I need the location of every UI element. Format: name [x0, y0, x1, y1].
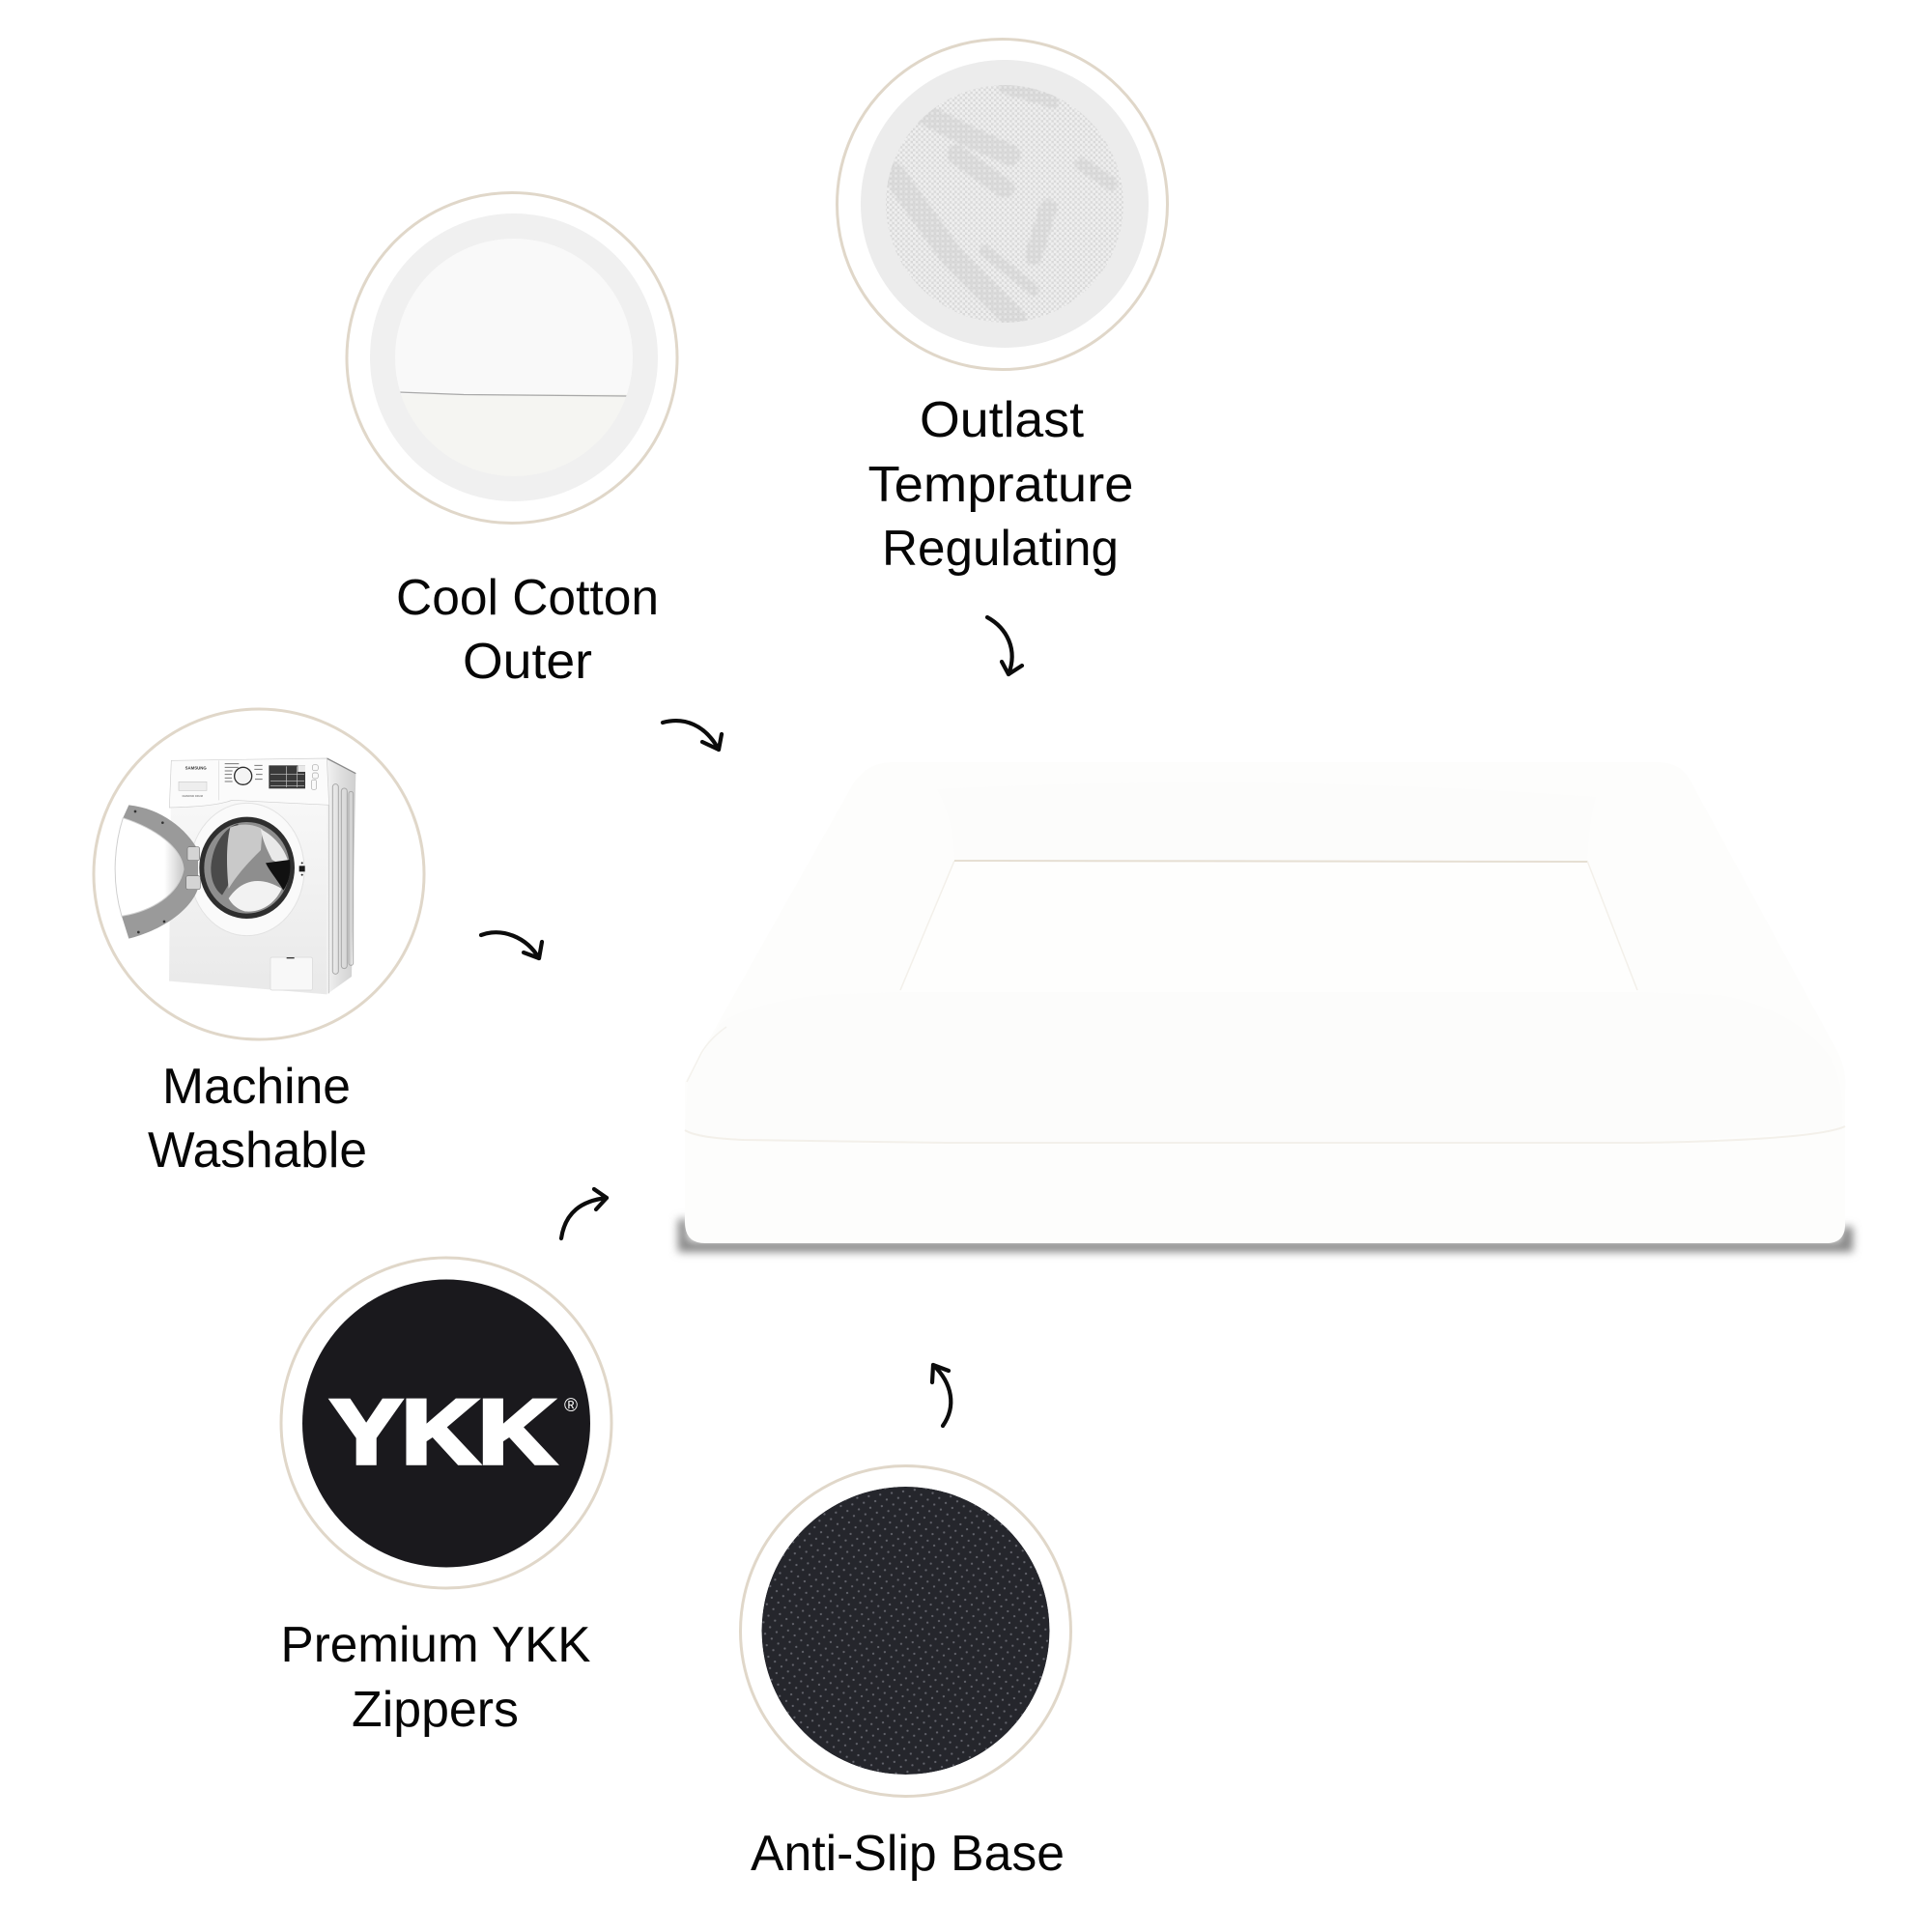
washing machine illustration: SAMSUNG	[185, 765, 207, 770]
badge ring	[347, 193, 677, 524]
YKK logo: ®	[564, 1396, 578, 1416]
back seam	[954, 861, 1587, 862]
label: Anti-Slip Base	[751, 1826, 1065, 1882]
washing machine illustration	[115, 758, 355, 994]
floor side seams	[900, 861, 1637, 990]
arrow	[663, 721, 722, 750]
cushion seam	[685, 1126, 1845, 1143]
badge ring	[740, 1466, 1070, 1797]
feature: Outlast temperature regulating	[837, 39, 1167, 674]
feature: anti-slip base	[740, 1365, 1070, 1882]
cotton swatch	[395, 239, 633, 397]
product: white bolster dog bed	[678, 762, 1853, 1252]
label: Temprature	[867, 457, 1134, 513]
YKK logo: YKK	[330, 1381, 555, 1482]
feature: premium YKK zippers	[280, 1189, 611, 1738]
feature: cool cotton outer	[347, 193, 722, 750]
label: Regulating	[882, 521, 1119, 577]
bed body	[685, 762, 1845, 1243]
label: Cool Cotton	[396, 570, 659, 626]
inner disc	[370, 213, 658, 501]
black logo disc	[302, 1279, 590, 1567]
arrow	[987, 617, 1022, 674]
badge ring	[94, 709, 424, 1039]
label: Premium YKK	[280, 1617, 591, 1673]
label: Washable	[148, 1122, 367, 1179]
washing machine illustration: DIAMOND DRUM	[183, 794, 203, 798]
bed shadow	[678, 1219, 1853, 1252]
sleeping surface	[900, 861, 1637, 992]
cushion shoulder line left	[687, 1027, 726, 1082]
dotted black swatch	[761, 1487, 1049, 1775]
arrow	[932, 1365, 951, 1426]
label: Outer	[463, 634, 592, 690]
arrow	[481, 932, 542, 958]
fabric weave swatch	[886, 85, 1123, 323]
front cushion	[685, 992, 1842, 1143]
badge ring	[837, 39, 1167, 369]
label: Outlast	[920, 392, 1085, 448]
feature: machine washable	[94, 709, 542, 1179]
arrow	[561, 1189, 607, 1238]
inner disc	[861, 60, 1149, 348]
label: Zippers	[352, 1682, 519, 1738]
back bolster inner wall	[937, 782, 1596, 861]
label: Machine	[162, 1059, 351, 1115]
badge ring	[281, 1258, 611, 1588]
